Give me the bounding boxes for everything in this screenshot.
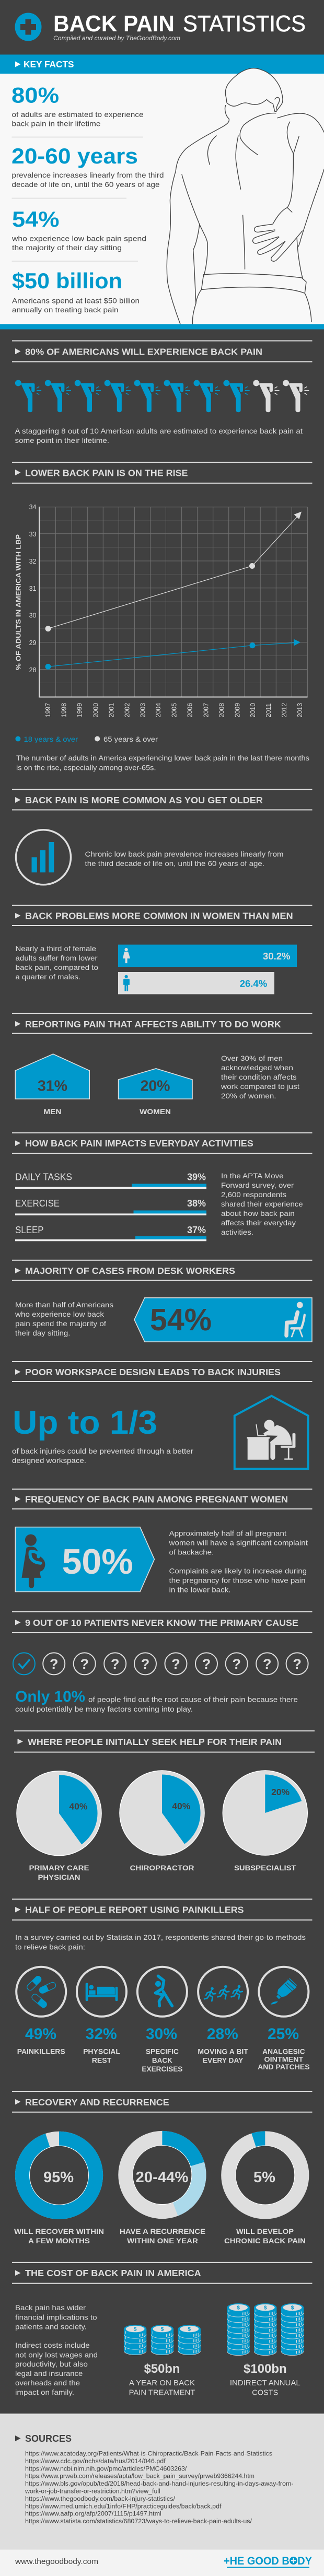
text block [15,2303,98,2396]
heading: RECOVERY AND RECURRENCE [25,2097,169,2107]
icon: stretching person [155,1976,172,2006]
donut chart: 95%: A FEW MONTHS [28,2237,90,2245]
x axis labels: 2010 [249,703,257,718]
stat: $100bn: COSTS [252,2388,278,2397]
bar: women 30.2%: 30.2% [263,951,291,962]
section: where people seek help [14,1730,315,1881]
bar: sleep 37%: 37% [187,1225,206,1235]
heading [12,905,313,926]
title: BACK PAIN [53,11,175,37]
icon: person slumped at desk in house [235,1396,308,1469]
donut chart: 20-44%: 20-44% [136,2169,189,2186]
fact: 54%: who experience low back pain spend [11,234,146,242]
stat: analgesic ointment 25%: AND PATCHES [258,2063,310,2071]
text block: in the lower back. [169,1585,231,1594]
x axis labels: 2008 [218,703,226,718]
text block [15,1933,306,1951]
heading: FREQUENCY OF BACK PAIN AMONG PREGNANT WOMEN [25,1494,288,1505]
text block [168,1529,308,1594]
fact: 20-60 years: 20-60 years [11,144,138,168]
text block: only 10% [15,1688,298,1713]
series: 65 years and over [45,512,302,631]
legend: 65 years & over [103,735,158,743]
title [53,11,306,37]
pie chart: primary care physician 40%: PHYSICIAN [38,1873,80,1881]
icon: bed [86,1983,118,2001]
text block: 20% of women. [221,1092,276,1100]
bar: daily tasks 39%: 39% [187,1172,206,1182]
icon: tall coin stacks [227,2303,304,2356]
source links: https://www.prweb.com/releases/apta/low_back_pain_survey/prweb9366244.htm [25,2474,254,2480]
text block: Indirect costs include [15,2341,90,2349]
fact: 54%: the majority of their day sitting [12,243,122,252]
stat: moving a bit 28% [198,1967,248,2065]
text block: legal and insurance [15,2369,83,2378]
fact: 54% [11,207,146,252]
text block: work compared to just [221,1082,299,1091]
icon: capsules [26,1975,57,2009]
text block: designed workspace. [12,1456,86,1465]
donut chart: 95%: WILL RECOVER WITHIN [14,2227,104,2235]
text block: of backache. [169,1548,214,1556]
sources heading: SOURCES [25,2433,72,2444]
text block: More than half of Americans [15,1301,113,1309]
y axis labels: 32 [29,558,37,565]
section: cost of back pain [12,2262,313,2397]
text block [221,1054,299,1100]
chart: men 31%: 31% [38,1078,67,1095]
heading: LOWER BACK PAIN IS ON THE RISE [25,467,188,478]
logo: The Good Body: +HE GOOD BODY [224,2555,312,2567]
text block [85,850,283,868]
icon: seated person [286,1302,305,1337]
fact: $50 billion: annually on treating back pain [12,306,118,314]
text block: only 10%: Only 10% [15,1688,85,1705]
stat: $100bn: $100bn [244,2362,287,2376]
donut chart: 5%: CHRONIC BACK PAIN [224,2237,306,2245]
stat: painkillers 49% [16,1967,66,2056]
x axis labels: 2002 [123,703,131,718]
callout: 54% sitting: 54% [150,1303,212,1337]
stat: physical rest 32%: REST [92,2056,112,2065]
icon: coin stacks [124,2325,201,2355]
text block: who experience low back [15,1310,105,1318]
text block: to relieve back pain: [15,1943,85,1951]
source links: https://www.thegoodbody.com/back-injury-statistics/ [25,2496,176,2502]
x axis labels: 1999 [76,703,84,718]
source links: https://www.med.umich.edu/1info/FHP/practiceguides/back/back.pdf [25,2503,222,2510]
section: painkillers [12,1899,313,2073]
text block: Chronic low back pain prevalence increases linearly from [85,850,283,858]
callout: 54% sitting [134,1298,312,1342]
x axis labels: 2012 [281,703,288,718]
stat: analgesic ointment 25% [258,1967,310,2071]
donut chart: 5% [224,2138,306,2245]
heading [12,1361,313,1382]
section: poor workspace design [12,1361,313,1469]
key facts heading band [0,54,324,74]
heading: POOR WORKSPACE DESIGN LEADS TO BACK INJURIES [25,1367,281,1377]
stat: $100bn [227,2303,304,2397]
heading [14,1730,315,1753]
stat: painkillers 49%: PAINKILLERS [17,2047,65,2056]
stat: specific back exercises 30%: SPECIFIC [146,2047,179,2056]
donut chart: 95% [14,2139,104,2245]
text block: their condition affects [221,1073,297,1081]
text block: the third decade of life on, until the 60 years of age. [85,859,264,868]
stat: specific back exercises 30%: EXERCISES [142,2065,182,2073]
bar: sleep 37%: SLEEP [15,1225,44,1235]
heading: BACK PROBLEMS MORE COMMON IN WOMEN THAN MEN [25,911,293,921]
y axis title: % OF ADULTS IN AMERICA WITH LBP [15,534,22,670]
heading: HOW BACK PAIN IMPACTS EVERYDAY ACTIVITIES [25,1138,253,1149]
icon: ointment tube [271,1978,297,2005]
text block: activities. [221,1228,253,1236]
section: women vs men [12,905,313,994]
chart: men 31% [15,1054,89,1116]
text block: of back injuries could be prevented through a better [12,1447,193,1455]
text block [221,1172,303,1236]
source links [25,2451,294,2525]
text block: pain spend the majority of [15,1319,106,1328]
x axis labels: 2013 [296,703,304,718]
section: recovery and recurrence [12,2091,313,2245]
heading [12,2091,313,2113]
heading [12,1260,313,1281]
stat: physical rest 32%: 32% [86,2025,117,2043]
big stat: up to 1/3: Up to 1/3 [13,1404,157,1441]
source links: https://www.cdc.gov/nchs/data/hus/2014/046.pdf [25,2458,166,2465]
y axis labels: 34 [29,504,37,511]
x axis labels: 2011 [265,704,272,718]
text block: Over 30% of men [221,1054,283,1062]
legend [15,735,158,743]
pie chart: subspecialist 20% [223,1771,307,1872]
y axis labels: 29 [29,639,37,647]
pie chart: subspecialist 20%: SUBSPECIALIST [234,1864,296,1872]
fact: 20-60 years [11,144,164,189]
chart: women 20%: 20% [140,1078,170,1095]
text block: shared their experience [221,1200,303,1208]
stat: painkillers 49%: 49% [25,2025,56,2043]
text block: The number of adults in America experiencing lower back pain in the last there months [16,754,309,762]
source links: https://www.bls.gov/opub/ted/2018/head-back-and-hand-injuries-resulting-in-days-away-from- [25,2481,294,2487]
text block: patients and society. [15,2322,87,2331]
text block: impact on family. [15,2388,74,2396]
section: 80% of Americans [12,341,313,444]
heading [12,1132,313,1154]
x axis labels: 2009 [234,703,241,718]
donut chart: 5%: 5% [253,2169,275,2186]
x axis labels: 2005 [170,703,178,718]
stat: $50bn: A YEAR ON BACK [129,2379,195,2387]
header [15,11,306,42]
donut chart: 20-44%: HAVE A RECURRENCE [120,2227,205,2235]
pie chart: subspecialist 20%: 20% [271,1787,290,1797]
pie chart: chiropractor 40% [120,1771,204,1872]
section: everyday activities [12,1132,313,1241]
source links: work-or-job-transfer-or-restriction.htm?view_full [25,2488,160,2495]
text block: a quarter of males. [16,973,80,981]
text block: overheads and the [15,2379,80,2387]
fact: $50 billion [12,268,140,314]
pie chart: primary care physician 40% [17,1771,101,1881]
stat: $50bn: $50bn [144,2362,180,2376]
donut chart: 20-44% [120,2138,205,2245]
heading [12,1489,313,1509]
y axis labels: 31 [29,585,37,592]
text block: In a survey carried out by Statista in 2017, respondents shared their go-to methods [15,1933,306,1941]
section: lower back pain on the rise [12,462,313,772]
heading: 9 OUT OF 10 PATIENTS NEVER KNOW THE PRIMARY CAUSE [25,1618,298,1628]
subtitle: Compiled and curated by TheGoodBody.com [53,36,180,42]
stat: $50bn: PAIN TREATMENT [129,2388,195,2397]
text block: 2,600 respondents [221,1190,286,1199]
stat: physical rest 32% [77,1967,126,2065]
key facts heading band: KEY FACTS [24,59,74,69]
text block: Back pain has wider [15,2303,86,2312]
pie chart: chiropractor 40%: CHIROPRACTOR [130,1864,194,1872]
source links: https://www.statista.com/statistics/680723/ways-to-relieve-back-pain-adults-us/ [25,2519,252,2525]
stat: moving a bit 28%: EVERY DAY [203,2056,244,2065]
stat: specific back exercises 30% [137,1967,187,2073]
stat: analgesic ointment 25%: 25% [268,2025,299,2043]
x axis labels: 2007 [203,703,210,718]
stat: moving a bit 28%: 28% [207,2025,238,2043]
fact: 20-60 years: decade of life on, until the 60 years of age [11,180,160,189]
bar: men 26.4% [118,972,274,994]
icon: medical cross [15,13,42,41]
text block: back pain, compared to [16,963,98,971]
y axis labels: 28 [29,666,37,674]
text block: women will have a significant complaint [168,1538,308,1547]
source links: https://www.ncbi.nlm.nih.gov/pmc/articles/PMC4603263/ [25,2466,187,2472]
text block: acknowledged when [221,1063,293,1072]
heading: HALF OF PEOPLE REPORT USING PAINKILLERS [25,1905,244,1915]
bottom blue band [0,324,324,329]
text block: productivity, but also [15,2360,88,2368]
heading: MAJORITY OF CASES FROM DESK WORKERS [25,1266,235,1276]
section: reporting pain affecting work [12,1013,313,1116]
illustration: man holding lower back [167,68,324,324]
text block: is on the rise, especially among over-65s. [16,764,156,772]
y axis labels: 30 [29,612,37,619]
source links: https://www.aafp.org/afp/2007/1115/p1497.html [25,2511,161,2518]
panel: footer [0,2550,324,2576]
stat: specific back exercises 30%: 30% [146,2025,177,2043]
heading [12,2262,313,2284]
source links: https://www.acatoday.org/Patients/What-is-Chiropractic/Back-Pain-Facts-and-Statistics [25,2451,272,2457]
panel: sources [0,2414,324,2550]
stat: physical rest 32%: PHYSCIAL [83,2047,120,2056]
bar: daily tasks 39%: DAILY TASKS [15,1172,72,1182]
heading: 80% OF AMERICANS WILL EXPERIENCE BACK PAIN [25,346,262,357]
fact: 80%: of adults are estimated to experience [11,110,144,119]
text block: In the APTA Move [221,1172,284,1180]
text block: affects their everyday [221,1219,296,1227]
heading [12,462,313,484]
bar: sleep 37% [15,1225,206,1241]
icon: rising bars in circle [16,830,71,885]
text block [12,1447,193,1465]
text block: not only lost wages and [15,2350,98,2359]
bar: men 26.4%: 26.4% [240,978,267,989]
x axis labels: 2003 [139,703,146,718]
text block: Nearly a third of female [16,944,96,953]
x axis labels [44,703,304,718]
fact: 80%: back pain in their lifetime [11,120,101,128]
bar: women 30.2% [118,945,297,967]
text block: the pregnancy for those who have pain [169,1576,305,1584]
donut chart: 20-44%: WITHIN ONE YEAR [127,2237,198,2245]
pie chart: chiropractor 40%: 40% [172,1801,191,1811]
pictogram: 8 of 10 people in pain [15,380,309,412]
text block: only 10%: of people find out the root cause of their pain because there [88,1695,298,1704]
fact: $50 billion: $50 billion [12,268,122,293]
chart: men 31%: MEN [43,1107,61,1116]
panel: key facts [0,54,324,329]
section: desk workers [12,1260,313,1342]
icon: runners [204,1985,242,2001]
heading [12,1013,313,1034]
stat: $50bn [124,2325,201,2397]
text block [15,1301,113,1337]
text block: about how back pain [221,1209,295,1217]
text block: Approximately half of all pregnant [169,1529,286,1537]
x axis labels: 2006 [186,703,193,718]
x axis labels: 2001 [108,703,115,718]
key facts background [0,74,324,324]
y axis labels: 33 [29,531,37,538]
donut chart: 95%: 95% [43,2169,74,2186]
text block: Complaints are likely to increase during [169,1566,307,1575]
x axis labels: 1998 [61,703,68,718]
stat: analgesic ointment 25%: ANALGESIC [262,2047,305,2056]
text block: Forward survey, over [221,1181,294,1189]
text block: their day sitting. [15,1329,70,1337]
x axis labels: 2000 [92,703,99,718]
pie chart: primary care physician 40%: PRIMARY CARE [29,1864,89,1872]
series: 18 years and over [45,639,300,670]
heading [12,789,313,811]
text block: some point in their lifetime. [15,436,109,444]
stat: moving a bit 28%: MOVING A BIT [198,2047,248,2056]
y axis labels [29,504,37,674]
section: pregnant women [12,1489,313,1594]
chart: women 20% [119,1069,192,1116]
section: more common as you get older [12,789,313,885]
heading: BACK PAIN IS MORE COMMON AS YOU GET OLDER [25,795,263,805]
section: primary cause [12,1611,313,1713]
text block [16,754,309,772]
x axis labels: 2004 [155,703,162,718]
stat: analgesic ointment 25%: OINTMENT [264,2055,304,2063]
text block [15,427,303,444]
bar: daily tasks 39% [15,1172,206,1189]
line chart [15,504,307,718]
title: STATISTICS [183,11,306,37]
x axis labels: 1997 [44,703,52,718]
legend: 18 years & over [24,735,78,743]
stat: $100bn: INDIRECT ANNUAL [230,2379,300,2387]
callout: 50% pregnant: 50% [62,1542,133,1582]
heading [12,341,313,362]
fact: 54%: 54% [12,207,60,231]
heading: THE COST OF BACK PAIN IN AMERICA [25,2268,201,2278]
fact: 80% [11,83,144,128]
heading [12,1611,313,1633]
donut chart: 5%: WILL DEVELOP [236,2227,294,2235]
grid [39,521,307,683]
heading [12,1899,313,1921]
heading: WHERE PEOPLE INITIALLY SEEK HELP FOR THEIR PAIN [28,1737,282,1747]
fact: 20-60 years: prevalence increases linearly from the third [11,171,164,179]
chart: women 20%: WOMEN [140,1107,171,1116]
footer url: www.thegoodbody.com [15,2557,98,2566]
callout: 50% pregnant [15,1527,154,1592]
bar: exercise 38% [15,1198,206,1215]
text block: A staggering 8 out of 10 American adults are estimated to experience back pain at [15,427,303,435]
icon: pregnant woman [22,1534,45,1588]
pie chart: primary care physician 40%: 40% [69,1801,88,1812]
text block: adults suffer from lower [16,954,98,962]
heading: REPORTING PAIN THAT AFFECTS ABILITY TO DO WORK [25,1019,281,1029]
text block [16,944,98,981]
text block: only 10%: could potentially be many factors coming into play. [15,1705,193,1713]
fact: $50 billion: Americans spend at least $50 billion [12,296,140,305]
icon row: one check, nine question marks [13,1653,308,1675]
stat: specific back exercises 30%: BACK [152,2056,172,2065]
bar: exercise 38%: 38% [187,1198,206,1209]
bar: exercise 38%: EXERCISE [15,1198,60,1209]
text block: financial implications to [15,2313,97,2321]
fact: 80%: 80% [11,83,59,108]
